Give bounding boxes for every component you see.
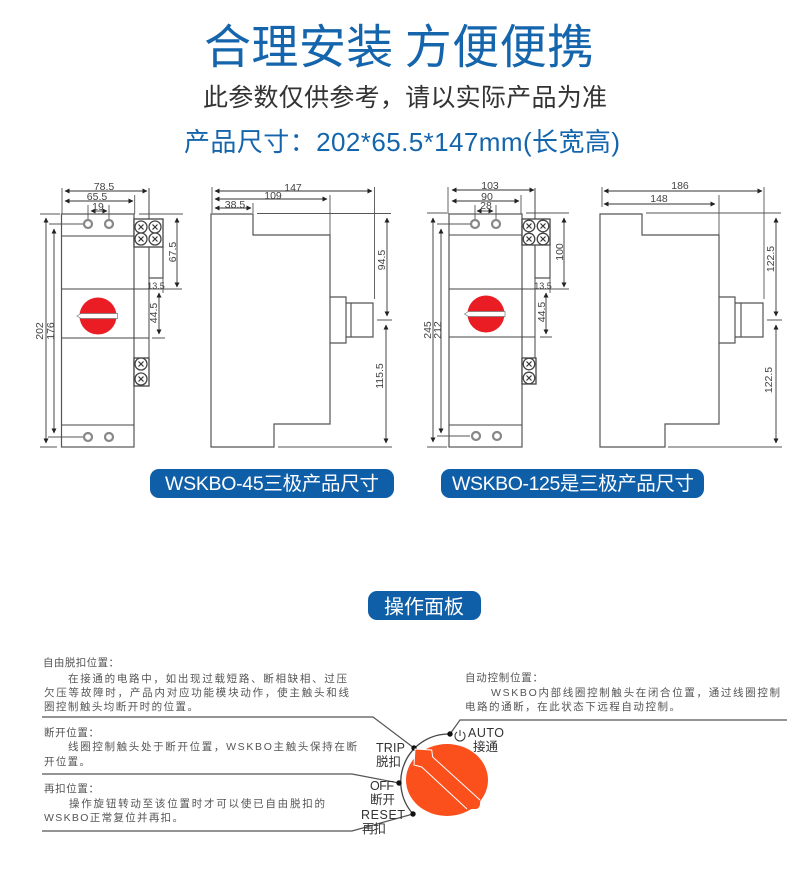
text block: 断开位置	[44, 726, 358, 768]
text block: 再扣位置	[44, 782, 325, 824]
dial position labels: 再扣	[362, 822, 386, 836]
diagram: WSKBO-125 front view: 212	[432, 321, 444, 339]
section pill: 操作面板: 操作面板	[384, 590, 464, 620]
dial position labels	[361, 726, 504, 836]
diagram: WSKBO-125 front view: 100	[554, 243, 566, 261]
section pill: 操作面板	[368, 590, 481, 620]
diagram: WSKBO-125 front view: 245	[422, 321, 434, 339]
text block: 自由脱扣位置: 在接通的电路中，如出现过载短路、断相缺相、过压	[68, 672, 348, 685]
diagram: WSKBO-125 side view: 148	[650, 193, 668, 205]
diagram: WSKBO-125 side view: 122.5	[765, 246, 777, 272]
dial position labels: RESET	[361, 808, 405, 822]
dial position labels: TRIP	[376, 741, 405, 755]
diagram: WSKBO-45 side view: 38.5	[225, 199, 245, 211]
icon: power symbol	[455, 730, 465, 741]
text block: 再扣位置: 操作旋钮转动至该位置时才可以使已自由脱扣的	[69, 797, 325, 810]
dial position labels: 接通	[473, 739, 498, 754]
text block: 断开位置: 断开位置：	[44, 726, 99, 739]
dial position labels: 脱扣	[376, 754, 401, 769]
subtitle note: 此参数仅供参考，请以实际产品为准	[203, 78, 607, 114]
title: 合理安装 方便便携	[204, 8, 594, 78]
diagram: WSKBO-45 side view	[211, 182, 392, 447]
label pill: WSKBO-125	[441, 469, 704, 498]
label pill: WSKBO-125: WSKBO-125是三极产品尺寸	[452, 473, 694, 495]
dial position labels: 断开	[370, 792, 395, 807]
product size line: 产品尺寸：202*65.5*147mm(长宽高)	[184, 127, 620, 157]
text block: 断开位置: 开位置。	[44, 755, 90, 768]
dial position labels: OFF	[370, 779, 394, 793]
diagram: WSKBO-45 front view: 78.5	[94, 181, 114, 193]
text block: 自由脱扣位置: 圈控制触头均断开时的位置。	[44, 700, 198, 713]
text block: 自动控制位置: WSKBO内部线圈控制触头在闭合位置，通过线圈控制	[491, 686, 780, 699]
label pill: WSKBO-45: WSKBO-45三极产品尺寸	[165, 473, 379, 495]
diagram: WSKBO-45 side view: 115.5	[374, 363, 386, 389]
diagram: WSKBO-125 front view: 28	[480, 200, 492, 212]
diagram: WSKBO-45 front view: 202	[34, 322, 46, 340]
dial position labels: AUTO	[468, 726, 504, 740]
text block: 自由脱扣位置: 自由脱扣位置：	[43, 656, 119, 669]
diagram: WSKBO-45 front view: 13.5	[147, 281, 165, 291]
diagram: WSKBO-45 front view: 176	[45, 322, 57, 340]
diagram: WSKBO-125 front view	[422, 180, 569, 447]
text block: 再扣位置: WSKBO正常复位并再扣。	[44, 811, 183, 824]
text block: 自动控制位置: 自动控制位置：	[465, 671, 543, 684]
diagram: WSKBO-125 front view: 90	[481, 191, 493, 203]
diagram: WSKBO-45 front view: 44.5	[148, 303, 160, 323]
diagram: WSKBO-45 front view: 19	[92, 201, 104, 213]
text block: 自由脱扣位置: 欠压等故障时，产品内对应功能模块动作，使主触头和线	[44, 686, 350, 699]
text block: 再扣位置: 再扣位置：	[44, 782, 99, 795]
diagram: WSKBO-125 side view: 186	[671, 180, 689, 192]
text block: 自由脱扣位置	[43, 656, 350, 713]
diagram: WSKBO-45 side view: 94.5	[376, 250, 388, 270]
control dial	[396, 731, 488, 817]
diagram: WSKBO-125 front view: 103	[481, 180, 499, 192]
diagram: WSKBO-45 side view: 109	[264, 190, 282, 202]
text block: 自动控制位置: 电路的通断，在此状态下远程自动控制。	[465, 700, 680, 713]
diagram: WSKBO-125 side view: 122.5	[763, 367, 775, 393]
diagram: WSKBO-125 front view: 44.5	[536, 302, 548, 322]
diagram: WSKBO-45 side view: 147	[284, 182, 302, 194]
text block: 自动控制位置	[465, 671, 780, 713]
text block: 断开位置: 线圈控制触头处于断开位置，WSKBO主触头保持在断	[68, 740, 358, 753]
diagram: WSKBO-125 side view	[600, 180, 782, 447]
label pill: WSKBO-45	[150, 469, 394, 498]
diagram: WSKBO-125 front view: 13.5	[534, 281, 552, 291]
diagram: WSKBO-45 front view: 67.5	[167, 242, 179, 262]
diagram: WSKBO-45 front view	[34, 181, 183, 447]
diagram: WSKBO-45 front view: 65.5	[87, 191, 107, 203]
leader lines	[42, 717, 787, 831]
